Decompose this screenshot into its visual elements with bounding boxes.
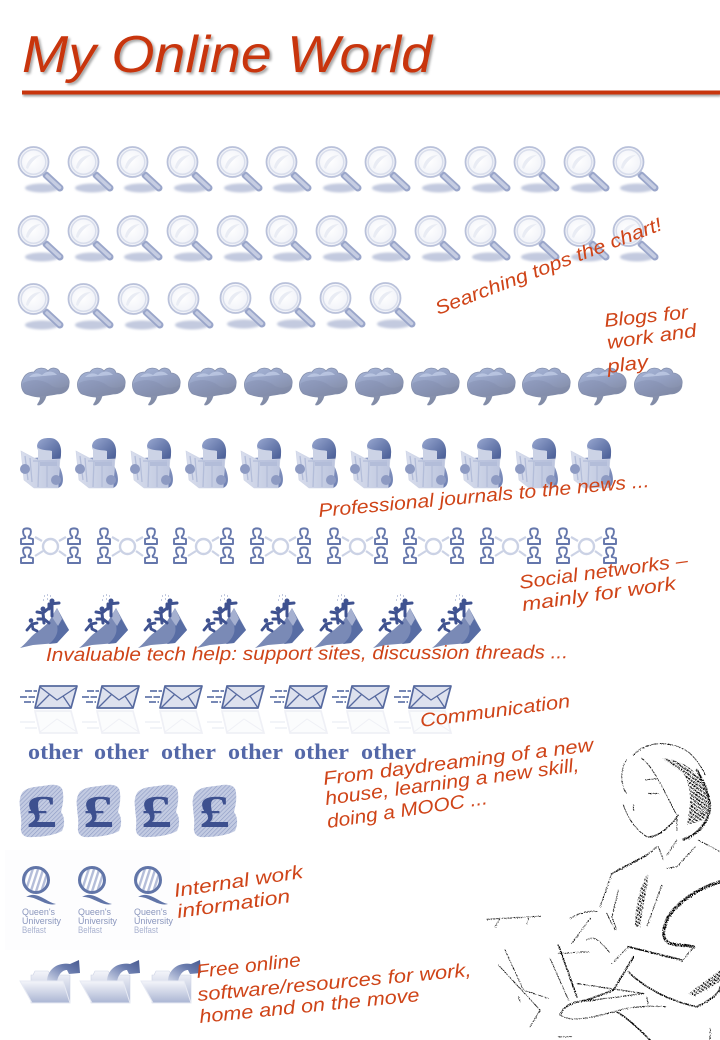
word row: other: other	[294, 739, 349, 764]
icon row: university logos: Queen's	[78, 907, 111, 918]
annotation: other: doing a MOOC ...	[326, 788, 489, 833]
icon row: pound signs	[20, 785, 237, 837]
icon row: pound signs: £	[141, 786, 172, 837]
icon row: university logos: Belfast	[134, 925, 158, 936]
annotation: internal information	[173, 862, 306, 923]
word row: other: other	[361, 739, 416, 764]
icon row: searching, line 3	[18, 283, 412, 330]
icon row: university logos: University	[134, 916, 173, 927]
icon row: university logos: University	[78, 916, 117, 927]
icon row: communication	[20, 686, 451, 733]
icon row: journals and news	[20, 438, 613, 488]
annotation: communication: Communication	[419, 691, 571, 732]
annotation: free software	[195, 950, 472, 1028]
annotation: blogs: Blogs for	[603, 302, 690, 332]
icon row: university logos: Queen's	[22, 907, 55, 918]
word row: other: other	[228, 739, 283, 764]
icon row: university logos: Belfast	[78, 925, 102, 936]
icon row: searching, line 1	[18, 147, 655, 192]
icon row: pound signs: £	[83, 786, 114, 837]
annotation: social networks: Social networks –	[518, 550, 690, 594]
annotation: tech help: Invaluable tech help: support sites, discussion threads ...	[46, 642, 568, 666]
title: My Online World	[22, 26, 434, 84]
icon row: social networks	[21, 528, 616, 563]
annotation: blogs: work and	[606, 320, 699, 354]
annotation: journals: Professional journals to the news ...	[318, 471, 650, 522]
annotation: blogs	[603, 302, 699, 378]
annotation: searching: Searching tops the chart!	[432, 214, 666, 320]
faint logo panel	[5, 850, 190, 950]
icon row: searching, line 2	[18, 216, 655, 262]
annotation: other	[322, 735, 596, 833]
word row: other: other	[161, 739, 216, 764]
icon row: blogs	[21, 368, 682, 405]
annotation: blogs: play	[605, 352, 651, 378]
annotation: social networks	[518, 550, 690, 616]
annotation: social networks: mainly for work	[521, 573, 679, 616]
title rule	[22, 90, 720, 94]
icon row: university logos: University	[22, 916, 61, 927]
icon row: tech help	[20, 595, 481, 648]
icon row: university logos: Belfast	[22, 925, 46, 936]
annotation: free software: Free online	[195, 950, 302, 983]
icon row: university logos	[22, 868, 173, 936]
word row: other	[28, 739, 416, 764]
word row: other: other	[94, 739, 149, 764]
annotation: internal information: information	[176, 886, 292, 923]
annotation: free software: home and on the move	[198, 985, 420, 1028]
icon row: folders	[20, 960, 201, 1003]
icon row: pound signs: £	[26, 786, 57, 837]
annotation: free software: software/resources for work,	[197, 960, 472, 1006]
annotation: internal information: Internal work	[173, 862, 306, 902]
word row: other: other	[28, 739, 83, 764]
icon row: university logos: Queen's	[134, 907, 167, 918]
illustration: sketch of woman at laptop	[487, 744, 720, 1040]
annotation: other: From daydreaming of a new	[322, 735, 596, 790]
annotation: other: house, learning a new skill,	[324, 755, 580, 810]
icon row: pound signs: £	[199, 786, 230, 837]
